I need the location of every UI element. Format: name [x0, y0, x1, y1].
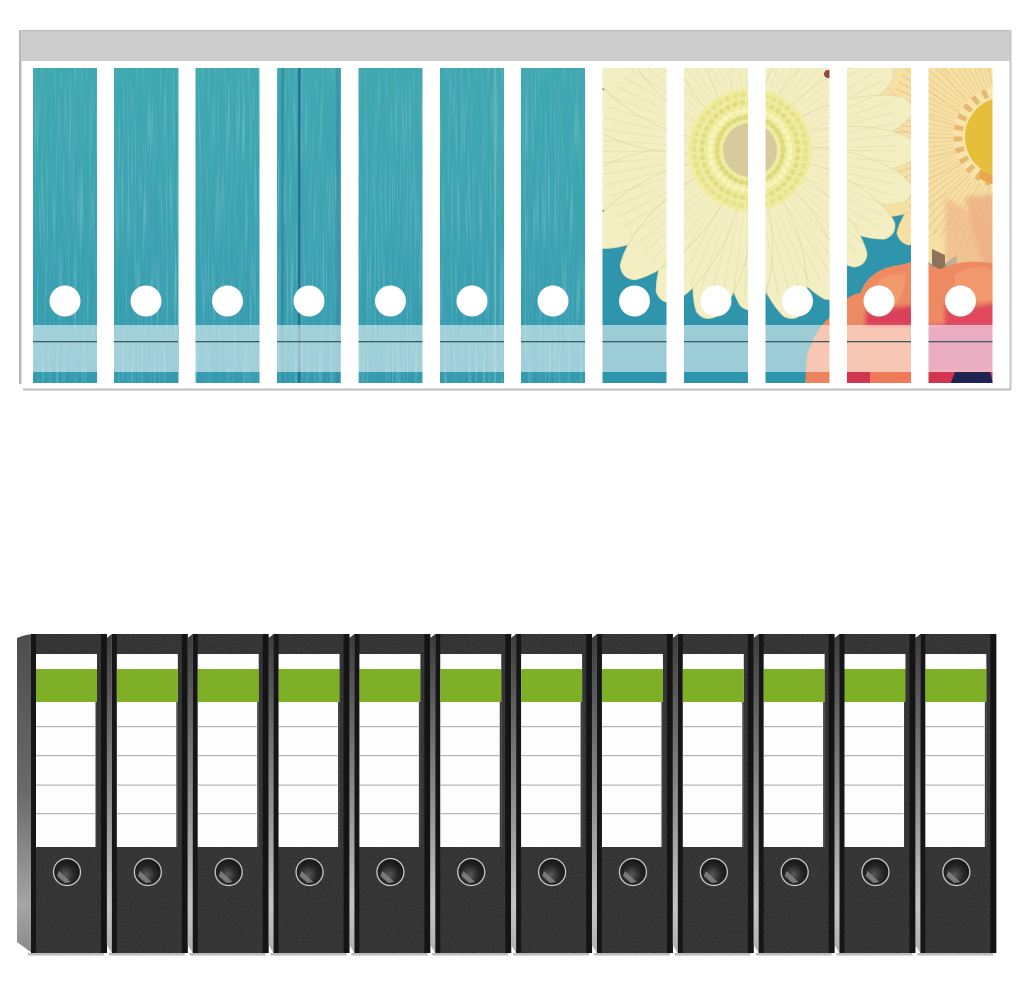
grey header band — [21, 31, 1010, 61]
binder 9 — [673, 634, 754, 956]
label strip 4 — [277, 68, 341, 383]
label strip 6 — [440, 68, 504, 383]
binder 8 — [592, 634, 673, 956]
binder 7 — [511, 634, 592, 956]
binder 4 — [269, 634, 350, 956]
binder 3 — [188, 634, 269, 956]
binder 6 — [430, 634, 511, 956]
label strip 2 — [114, 68, 178, 383]
binder 12 — [915, 634, 996, 956]
binder 2 — [107, 634, 188, 956]
binder 1 — [17, 634, 107, 956]
binder 11 — [834, 634, 916, 956]
label strip 9 — [684, 68, 748, 383]
label strip 7 — [521, 68, 585, 383]
label strip 3 — [196, 68, 260, 383]
label sheet panel — [19, 0, 1024, 390]
label strip 1 — [33, 68, 97, 383]
label strip 11 — [847, 68, 911, 383]
label strip 8 — [602, 68, 666, 383]
label strip 10 — [766, 68, 830, 383]
sheet outline and shadow — [19, 30, 1012, 390]
label strip 12 — [928, 68, 992, 383]
binder 10 — [754, 634, 835, 956]
row of binders — [17, 634, 996, 956]
label strip 5 — [358, 68, 422, 383]
binder 5 — [349, 634, 430, 956]
